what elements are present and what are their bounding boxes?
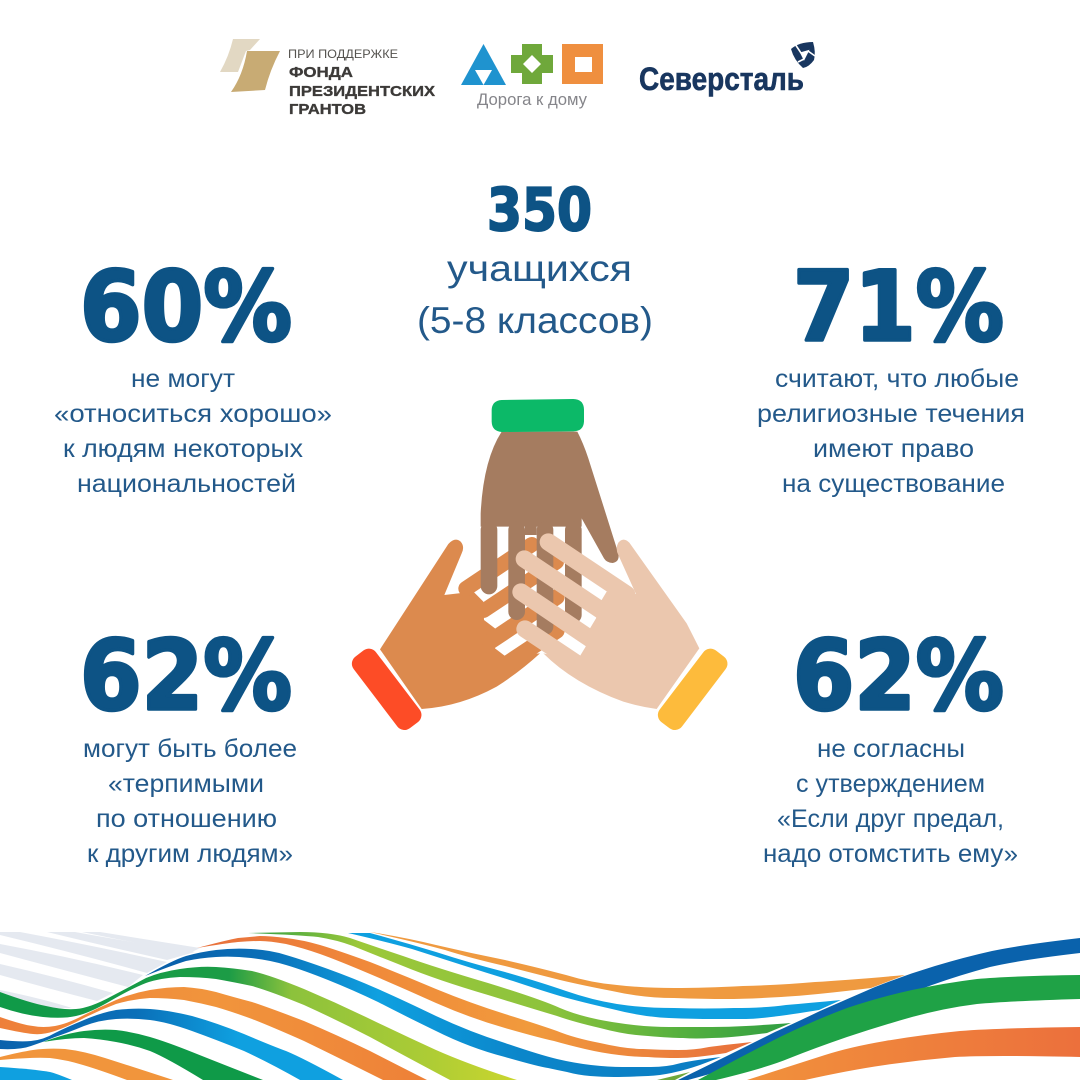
- description: «Если друг предал,: [777, 805, 1004, 833]
- description: по отношению: [96, 805, 277, 833]
- description: считают, что любые: [775, 365, 1019, 393]
- description: имеют право: [813, 435, 974, 463]
- blue ribbon: [145, 949, 721, 1077]
- description: религиозные течения: [757, 400, 1025, 428]
- third orange ribbon: [0, 1049, 173, 1080]
- description: могут быть более: [83, 735, 297, 763]
- cuff: green: [492, 399, 584, 432]
- second blue ribbon: [0, 1009, 343, 1080]
- description: надо отомстить ему»: [763, 840, 1018, 868]
- decorative wave ribbons: [0, 932, 1080, 1080]
- description: «терпимыми: [108, 770, 264, 798]
- description: к людям некоторых: [63, 435, 304, 463]
- description: не согласны: [817, 735, 965, 763]
- stat: 350 students: [417, 175, 653, 341]
- logo text: [288, 47, 435, 118]
- description: с утверждением: [796, 770, 985, 798]
- logo text: ГРАНТОВ: [289, 101, 366, 118]
- icon: orange square: [562, 44, 603, 84]
- description: [54, 365, 332, 498]
- number: 62%: [793, 620, 1004, 732]
- big orange ribbon: [747, 1027, 1080, 1080]
- lime ribbon: [248, 932, 791, 1038]
- label: учащихся: [447, 248, 632, 289]
- grey ribbons: [0, 932, 200, 1008]
- orange hand: [380, 540, 557, 709]
- logo: Doroga k domu: [461, 44, 603, 109]
- big blue ribbon: [678, 938, 1080, 1080]
- logo text: Северсталь: [639, 61, 804, 97]
- description: национальностей: [77, 470, 296, 498]
- label: (5-8 классов): [417, 300, 653, 341]
- thin orange ribbon: [370, 932, 905, 999]
- second green ribbon: [43, 1030, 263, 1080]
- logo text: ПРИ ПОДДЕРЖКЕ: [288, 47, 398, 61]
- logo: Severstal: [639, 42, 815, 97]
- second orange ribbon: [0, 987, 427, 1080]
- description: на существование: [782, 470, 1005, 498]
- logo mark: beige parallelograms: [220, 39, 280, 92]
- description: «относиться хорошо»: [54, 400, 332, 428]
- brown hand: [481, 432, 619, 627]
- number: 62%: [80, 620, 292, 732]
- description: не могут: [131, 365, 236, 393]
- third blue ribbon: [0, 1067, 72, 1080]
- big green ribbon: [698, 975, 1080, 1080]
- logo text: ПРЕЗИДЕНТСКИХ: [289, 83, 435, 100]
- icon: green cross: [511, 44, 553, 84]
- thin blue ribbon: [348, 933, 841, 1019]
- orange ribbon: [197, 936, 752, 1058]
- icon: Severstal mark: [791, 42, 815, 68]
- number: 71%: [793, 251, 1004, 363]
- illustration: three stacked hands: [348, 399, 731, 734]
- description: [83, 735, 297, 868]
- description: [757, 365, 1025, 498]
- green ribbon: [0, 967, 517, 1080]
- logo text: ФОНДА: [289, 64, 353, 81]
- number 350: 350: [487, 175, 592, 244]
- description: к другим людям»: [87, 840, 293, 868]
- cuff: yellow: [654, 645, 731, 734]
- stat: 62% revenge: [763, 620, 1018, 868]
- stat: 71%: [757, 251, 1025, 498]
- icon: blue triangle: [461, 44, 506, 85]
- cuff: red: [348, 645, 425, 734]
- logo text: Дорога к дому: [477, 91, 588, 109]
- light hand: [521, 540, 699, 709]
- stat: 62% tolerance: [80, 620, 297, 868]
- stat: 60%: [54, 251, 332, 498]
- description: [763, 735, 1018, 868]
- logo: Presidential Grants Foundation: [220, 39, 435, 118]
- number: 60%: [80, 251, 292, 363]
- sliver: [657, 1072, 690, 1080]
